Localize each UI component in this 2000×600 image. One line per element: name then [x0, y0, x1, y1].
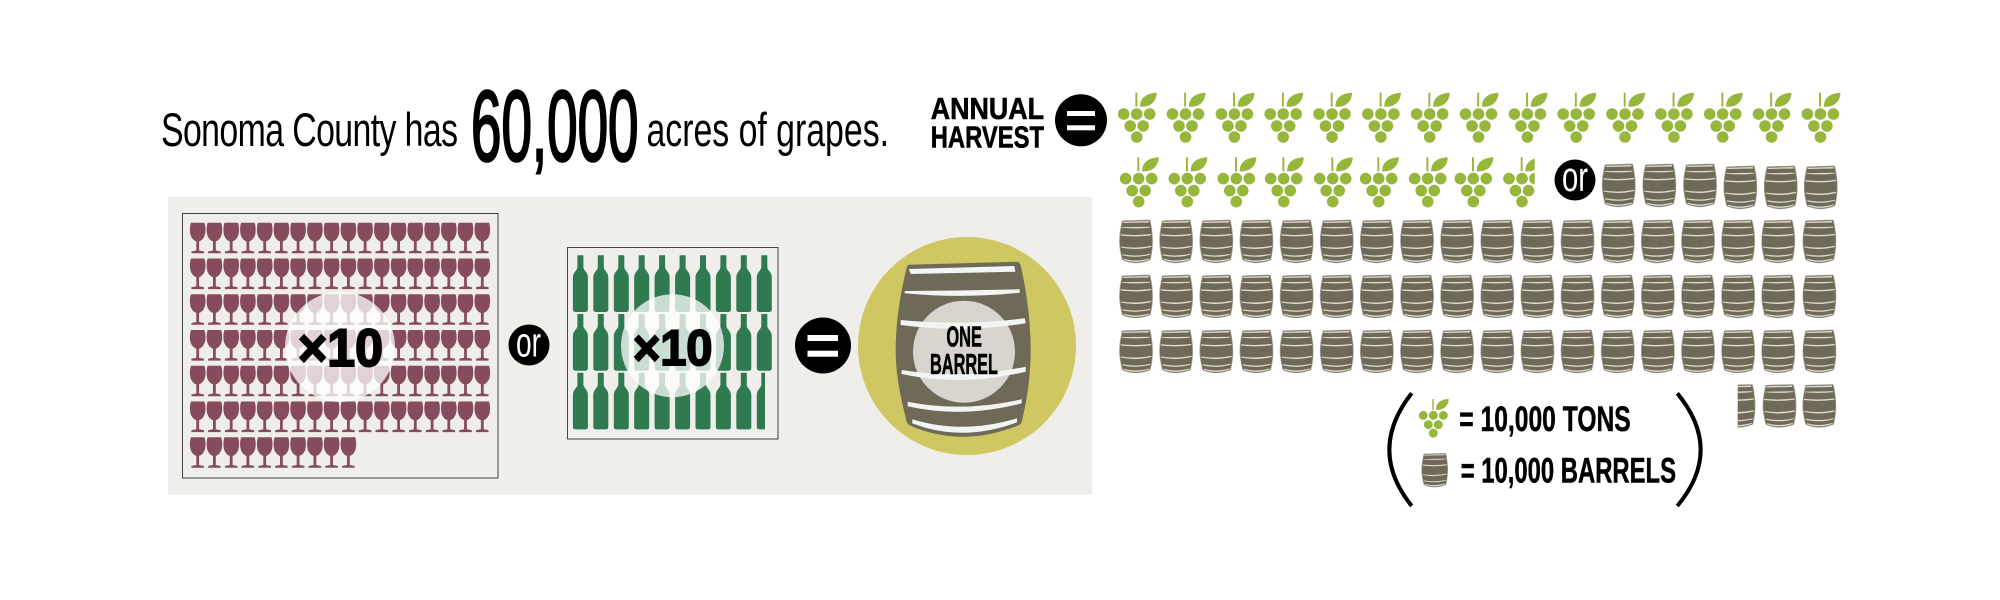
- one barrel illustration: ONE: [946, 322, 982, 354]
- grape icons row 1: [1118, 93, 1840, 143]
- frame of wine glasses: [182, 214, 498, 478]
- panel background: [168, 197, 1092, 495]
- frame of wine glasses: ×10: [298, 319, 383, 378]
- frame of wine bottles: [568, 248, 778, 439]
- legend icon: barrel: [1422, 453, 1448, 487]
- legend icon: grape: [1419, 399, 1449, 438]
- or badge: harvest: or: [1562, 153, 1588, 200]
- legend text: barrels: = 10,000 BARRELS: [1461, 451, 1676, 490]
- frame of wine bottles: ×10: [633, 320, 712, 376]
- one barrel illustration: BARREL: [930, 349, 998, 381]
- annual harvest label: ANNUAL: [931, 91, 1044, 126]
- heading text: Sonoma County has: Sonoma County has: [161, 104, 458, 156]
- heading text: acres of grapes: acres of grapes.: [646, 104, 889, 156]
- or badge: or: [516, 319, 541, 366]
- big number: 60,000: 60,000: [471, 71, 638, 183]
- legend: [1389, 393, 1701, 506]
- annual harvest label: [931, 91, 1044, 154]
- equals badge: annual harvest: [1055, 94, 1107, 146]
- annual harvest label: HARVEST: [931, 119, 1044, 154]
- legend text: tons: = 10,000 TONS: [1459, 400, 1631, 439]
- barrel icons: [1120, 164, 1837, 427]
- panel: wine equivalence: [168, 197, 1092, 495]
- equals badge: [795, 318, 851, 374]
- heading: Sonoma County has 60,000 acres of grapes: [161, 71, 889, 183]
- one barrel illustration: [858, 237, 1076, 455]
- grape icons row 2: [1120, 157, 1542, 207]
